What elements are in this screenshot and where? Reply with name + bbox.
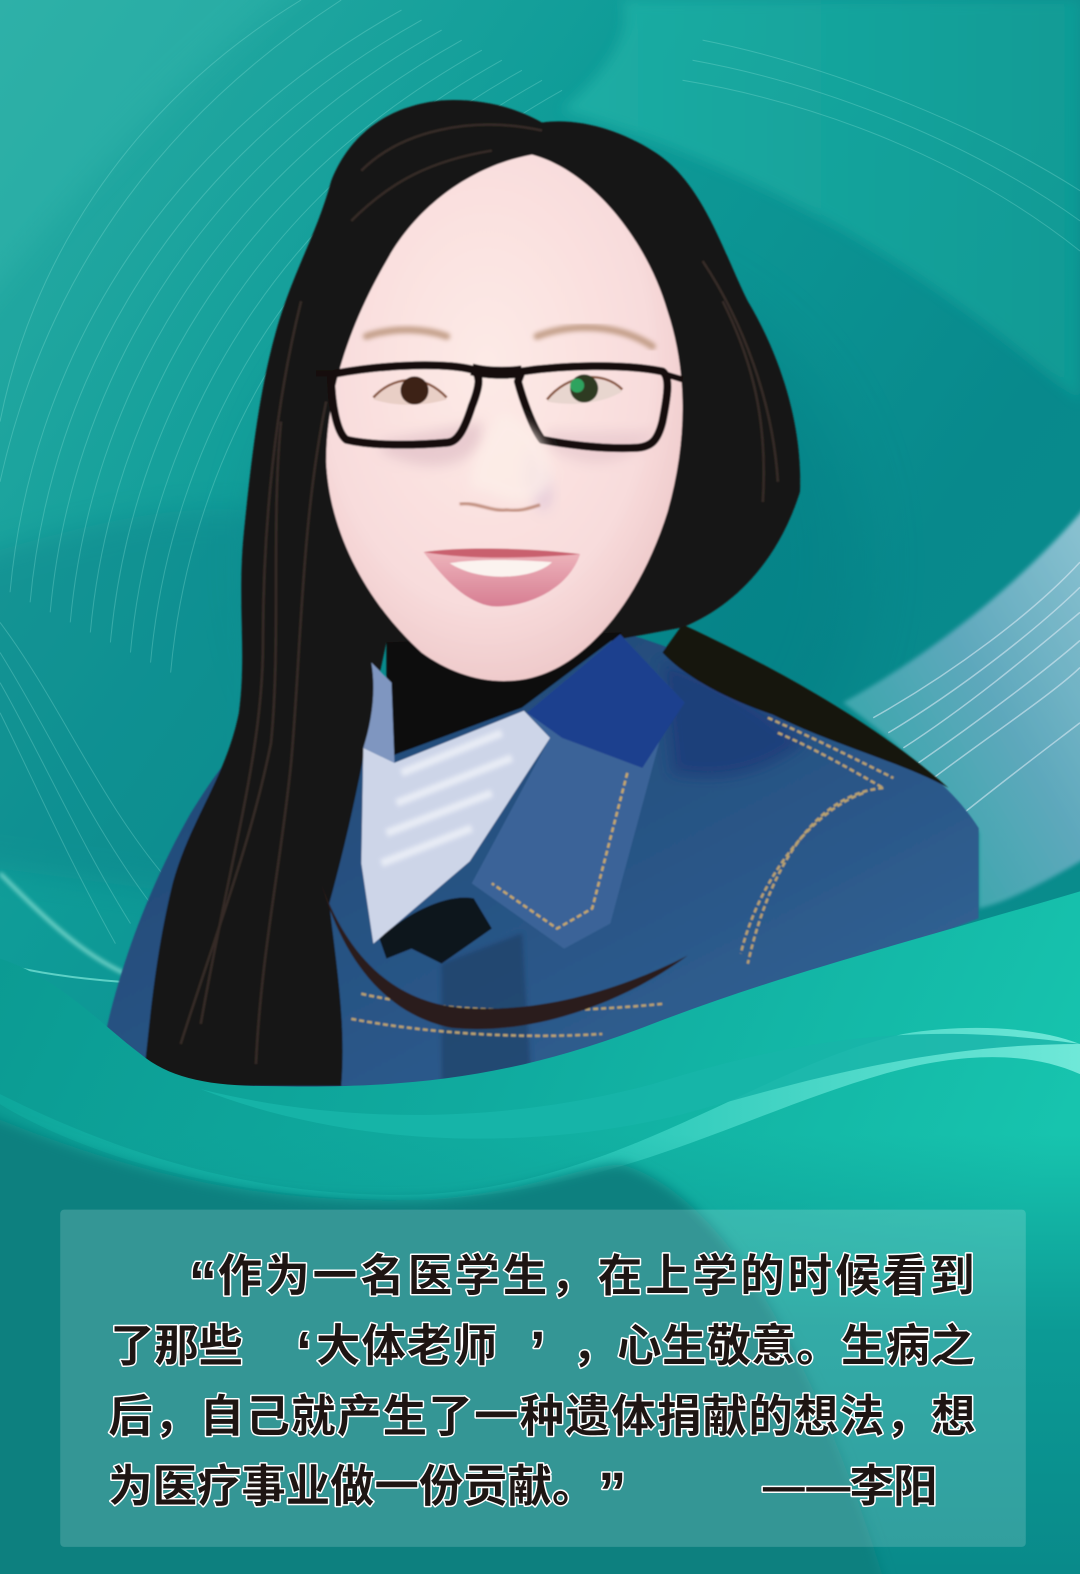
quote text bbox=[108, 1250, 976, 1524]
dark collar under neck bbox=[379, 897, 492, 964]
portrait bbox=[105, 100, 979, 1089]
mouth bbox=[424, 548, 580, 606]
neck shadow bbox=[386, 632, 622, 758]
quote text: 心生敬意。生病之 bbox=[617, 1322, 975, 1371]
jacket bbox=[105, 632, 979, 1089]
quote text: 了那些 bbox=[110, 1322, 243, 1371]
shirt collar bbox=[361, 663, 550, 944]
eyebrows bbox=[366, 327, 652, 346]
right eye bbox=[547, 374, 622, 404]
quote text: 为医疗事业做一份贡献。 bbox=[108, 1463, 596, 1512]
back hair on the shoulder bbox=[662, 624, 949, 788]
lower right fade bbox=[0, 1134, 1080, 1574]
lower light ribbons bbox=[0, 1028, 1080, 1200]
jacket dark shoulder shade bbox=[662, 663, 803, 777]
quote text: ” bbox=[598, 1461, 626, 1524]
lower hair strand bbox=[321, 883, 688, 1029]
left light streak bbox=[0, 873, 125, 982]
quote text: ——李阳 bbox=[763, 1463, 937, 1512]
denim collar bbox=[472, 634, 685, 949]
right side light swoosh bbox=[843, 497, 1080, 908]
hair highlights bbox=[181, 125, 778, 1064]
dark lower blob bbox=[0, 1094, 903, 1574]
quote text: “ bbox=[189, 1250, 217, 1313]
quote text: 作为一名医学生，在上学的时候看到 bbox=[218, 1252, 975, 1301]
left eye bbox=[373, 376, 447, 405]
nose bbox=[460, 412, 552, 510]
quote text: ‘ bbox=[296, 1320, 312, 1383]
cheek shadows bbox=[381, 422, 657, 512]
front placket bbox=[442, 934, 532, 1089]
decorative fine line arcs bbox=[0, 0, 1080, 944]
quote text: ’ bbox=[530, 1320, 546, 1383]
quote text: 大体老师 bbox=[316, 1322, 497, 1371]
quote text: 后，自己就产生了一种遗体捐献的想法，想 bbox=[108, 1392, 976, 1441]
quote text: ， bbox=[572, 1322, 616, 1371]
lower wave panel bbox=[0, 891, 1080, 1574]
hair bbox=[146, 100, 800, 1086]
glasses bbox=[316, 365, 683, 448]
jacket seams bbox=[351, 718, 893, 1036]
quote panel bbox=[60, 1210, 1026, 1547]
face bbox=[326, 155, 683, 681]
